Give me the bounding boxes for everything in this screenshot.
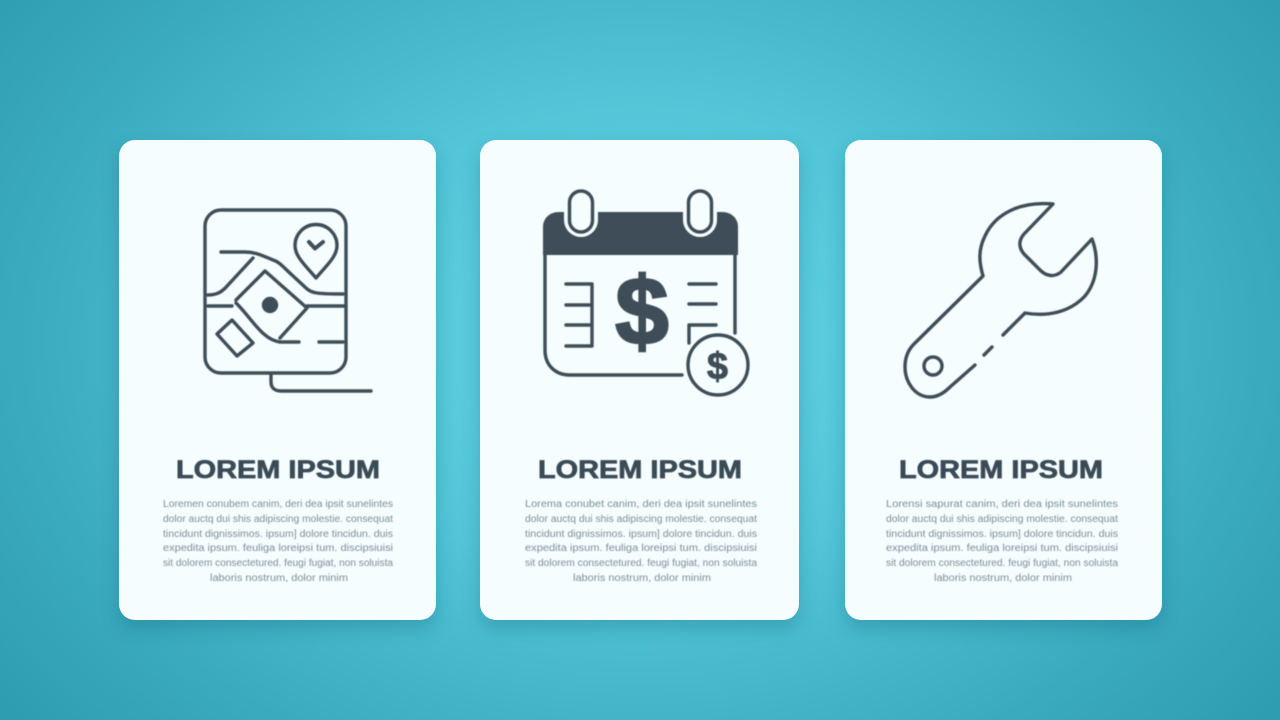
- body text: expedita ipsum. feuliga loreipsi tum. discipsiuisi: [525, 543, 757, 554]
- body text: Lorema conubet canim, deri dea ipsit sunelintes: [525, 499, 757, 510]
- body text: sit dolorem consectetured. feugi fugiat, non soluista: [163, 558, 393, 569]
- body text: dolor auctq dui shis adipiscing molestie. consequat: [163, 514, 393, 525]
- body text: tincidunt dignissimos. ipsum] dolore tincidun. duis: [525, 529, 757, 540]
- body text: sit dolorem consectetured. feugi fugiat, non soluista: [525, 558, 757, 569]
- coin: [688, 335, 748, 395]
- body text: laboris nostrum, dolor minim: [210, 573, 348, 584]
- body text: laboris nostrum, dolor minim: [573, 573, 711, 584]
- body text: sit dolorem consectetured. feugi fugiat, non soluista: [886, 558, 1118, 569]
- icon: calendar with dollar: [543, 186, 748, 395]
- body text: tincidunt dignissimos. ipsum] dolore tincidun. duis: [163, 529, 393, 540]
- body text: expedita ipsum. feuliga loreipsi tum. discipsiuisi: [163, 543, 393, 554]
- panel: map card: [119, 140, 436, 620]
- body text: [886, 499, 1118, 584]
- body text: Loremen conubem canim, deri dea ipsit sunelintes: [163, 499, 393, 510]
- body text: Lorensi sapurat canim, deri dea ipsit sunelintes: [886, 499, 1118, 510]
- icon: wrench: [905, 204, 1096, 397]
- body text: dolor auctq dui shis adipiscing molestie. consequat: [886, 514, 1118, 525]
- big dollar sign: $: [615, 258, 669, 365]
- body text: [525, 499, 757, 584]
- panel: calendar card: [480, 140, 799, 620]
- heading: LOREM IPSUM: [176, 456, 380, 484]
- body text: expedita ipsum. feuliga loreipsi tum. discipsiuisi: [886, 543, 1118, 554]
- heading: LOREM IPSUM: [538, 456, 742, 484]
- body text: [163, 499, 393, 584]
- icon: calendar with dollar: $: [707, 346, 728, 388]
- panel: wrench card: [845, 140, 1162, 620]
- body text: tincidunt dignissimos. ipsum] dolore tincidun. duis: [886, 529, 1118, 540]
- body text: laboris nostrum, dolor minim: [934, 573, 1072, 584]
- heading: LOREM IPSUM: [899, 456, 1103, 484]
- body text: dolor auctq dui shis adipiscing molestie. consequat: [525, 514, 757, 525]
- icon: map with pin: [205, 210, 371, 391]
